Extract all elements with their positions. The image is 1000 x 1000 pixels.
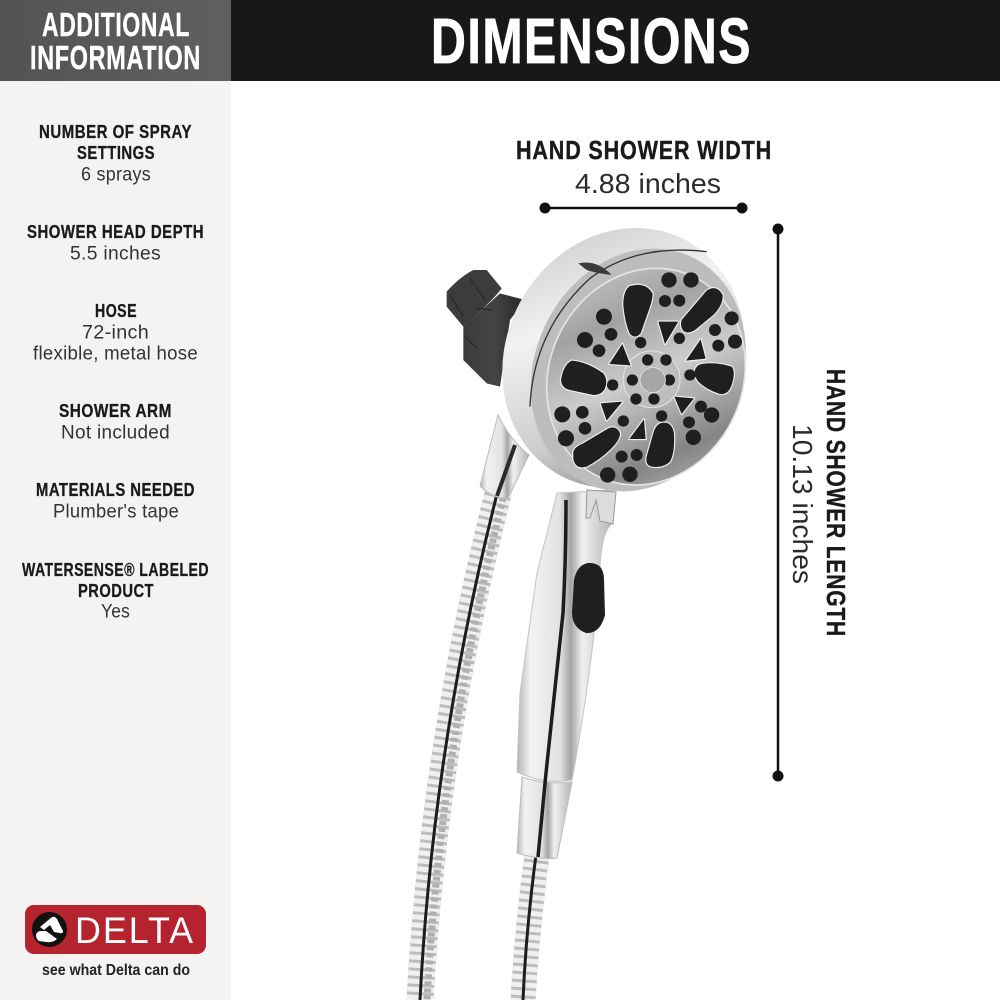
spec: shower head depth	[27, 221, 204, 264]
spec: watersense	[22, 559, 209, 622]
length dimension: HAND SHOWER LENGTH	[821, 369, 849, 637]
spec: spray settings: NUMBER OF SPRAY	[39, 121, 192, 142]
shower head	[447, 185, 789, 531]
header: additional information	[0, 0, 231, 81]
length dimension: 10.13 inches	[787, 424, 818, 584]
spec: hose: 72-inch	[82, 322, 149, 344]
hand shower illustration	[420, 185, 789, 1000]
header: additional information: INFORMATION	[30, 39, 201, 76]
button	[572, 563, 605, 633]
header: dimensions: DIMENSIONS	[431, 5, 752, 77]
shell reflection	[578, 263, 612, 275]
spec: materials needed: Plumber's tape	[53, 500, 179, 522]
hose: right	[523, 855, 537, 1000]
spec: watersense: Yes	[101, 600, 130, 622]
spec: shower head depth: 5.5 inches	[70, 242, 161, 264]
jet holes	[554, 272, 742, 483]
rim arc	[530, 250, 707, 407]
spec: watersense: PRODUCT	[78, 580, 154, 601]
spec: materials needed	[36, 479, 195, 522]
handle dark line	[538, 500, 566, 857]
width dimension	[516, 137, 772, 214]
header: dimensions	[231, 0, 1000, 81]
delta logo	[25, 905, 206, 979]
delta logo: see what Delta can do	[42, 962, 190, 979]
spec: hose: flexible, metal hose	[33, 342, 198, 364]
ball mount	[447, 270, 525, 387]
width dimension: 4.88 inches	[575, 168, 721, 199]
spec: hose: HOSE	[95, 300, 137, 321]
width dimension: HAND SHOWER WIDTH	[516, 137, 772, 165]
spec: shower arm: Not included	[61, 422, 170, 444]
hose: left	[420, 490, 505, 1000]
handle collar	[517, 777, 572, 858]
handle clip	[586, 490, 616, 524]
spec: hose	[33, 300, 198, 364]
center hub	[640, 367, 665, 393]
length dimension	[772, 224, 849, 782]
hub ring	[623, 351, 680, 408]
spec: spray settings: SETTINGS	[77, 142, 155, 163]
sidebar panel	[0, 81, 231, 1000]
spec: shower head depth: SHOWER HEAD DEPTH	[27, 221, 204, 242]
spec: materials needed: MATERIALS NEEDED	[36, 479, 195, 500]
shell rim	[492, 213, 785, 527]
face	[512, 236, 780, 518]
shell	[457, 185, 789, 531]
spec: spray settings: 6 sprays	[81, 164, 151, 186]
spec: shower arm	[59, 400, 172, 444]
spray pads	[561, 285, 734, 467]
spec: spray settings	[39, 121, 192, 186]
spec: shower arm: SHOWER ARM	[59, 400, 172, 421]
handle	[517, 490, 613, 781]
delta logo: DELTA	[75, 910, 195, 951]
spec list	[22, 121, 209, 622]
hose connector	[480, 415, 529, 498]
header: additional information: ADDITIONAL	[42, 6, 190, 43]
spec: watersense: WATERSENSE® LABELED	[22, 559, 209, 580]
